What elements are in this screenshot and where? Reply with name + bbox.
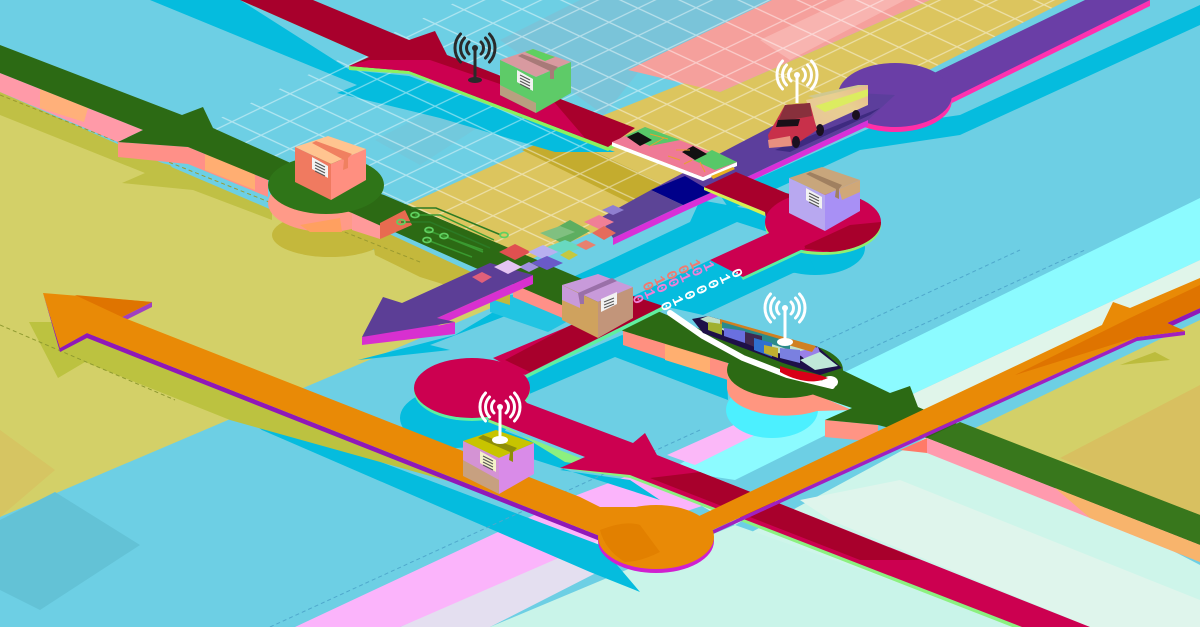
purple fragment (600, 190, 683, 238)
wall node left (268, 174, 384, 232)
tape (312, 141, 352, 170)
tractor wheel rear (816, 124, 824, 136)
hull (692, 316, 842, 375)
trailer top (808, 85, 868, 100)
right face (536, 62, 571, 113)
shadow: orange arrow on yellow (29, 322, 480, 490)
trace 5 (444, 236, 483, 252)
crimson lower road (488, 395, 1090, 627)
label (806, 188, 822, 209)
shadow: crimson left of box (490, 295, 570, 332)
top face (789, 167, 860, 195)
label (480, 451, 496, 472)
orange left wing dark (75, 295, 152, 317)
right face (331, 149, 366, 200)
chip and pixel fragments (472, 127, 737, 283)
board lower wall (612, 142, 737, 181)
shadow on central yellow (522, 135, 665, 203)
wall mid highlight (665, 344, 710, 374)
top accent (525, 49, 555, 61)
boxes (295, 49, 860, 494)
shadow: orange left road (222, 402, 640, 592)
pixel: salmon (576, 240, 596, 250)
pixel: lilac 2 (528, 245, 558, 259)
green road left (0, 45, 1200, 545)
purple node (838, 63, 952, 127)
top face (295, 136, 366, 164)
shadow: purple road (540, 200, 768, 292)
lines: pink box (483, 456, 493, 470)
box: tan (562, 274, 633, 338)
stem (498, 407, 502, 440)
crimson node lime edge (765, 195, 881, 255)
pad b (411, 212, 419, 218)
lines: green box (520, 75, 530, 89)
antenna: box (480, 393, 520, 444)
crimson down road upper part (710, 225, 805, 277)
wall left (0, 73, 143, 142)
antenna: truck (777, 61, 817, 103)
band: grey wedge (375, 75, 520, 165)
trace 2 (415, 215, 494, 240)
shadow: orange arrow right on yellow (1120, 352, 1170, 365)
pixel: yellow green (560, 250, 578, 260)
navy block (651, 176, 712, 205)
pixel: lilac (602, 205, 624, 215)
wall red corner (900, 438, 927, 453)
trailer stripe (815, 89, 868, 112)
dashed route: right blue 1 (820, 250, 1020, 343)
pixel: mid purple (519, 262, 539, 272)
lines: orange box (315, 162, 325, 176)
shadow: purple arrow (358, 290, 560, 360)
containers green (708, 322, 722, 335)
purple node wall (838, 68, 952, 132)
crimson node right (765, 192, 881, 252)
containers teal (722, 322, 790, 350)
waves (765, 294, 805, 322)
shadow: green arrow tail (110, 150, 193, 190)
stern deck purple (796, 347, 822, 360)
field: lower left teal facet (0, 492, 140, 610)
band: pink strip (295, 475, 705, 627)
purple top road (930, 0, 1150, 100)
binary row: orange: 01001 (637, 257, 706, 298)
right face (499, 443, 534, 494)
green road right wall (927, 438, 1200, 562)
shadow: green road right of node (370, 225, 510, 305)
waves (480, 393, 520, 421)
left face (463, 441, 499, 494)
board surface (612, 127, 737, 177)
binary digits on road (627, 257, 747, 318)
tip (782, 305, 788, 311)
trace 1 (411, 208, 501, 235)
crimson mid road edge (741, 247, 805, 280)
band: mint above orange road (860, 260, 1200, 430)
base (492, 436, 508, 444)
tape (806, 172, 842, 199)
crimson road edge below box (525, 306, 663, 378)
band: bright cyan right (670, 198, 1200, 480)
crimson lower road edge (488, 416, 1030, 627)
binary row: pink: 0100101 (627, 259, 719, 311)
pad e (440, 234, 448, 238)
purple lower arrow (362, 263, 533, 337)
stem (784, 308, 786, 342)
chip 2 (682, 146, 707, 160)
red pad (380, 210, 412, 239)
base (777, 338, 793, 346)
left face (500, 60, 536, 113)
wall highlight left (40, 89, 88, 122)
crimson right segment (704, 172, 830, 233)
pixel: green (545, 220, 590, 245)
dashed routes (0, 95, 1085, 627)
containers dark (745, 332, 762, 350)
band: lower right mint (700, 430, 1200, 627)
containers blue (724, 328, 745, 343)
containers orange (720, 319, 816, 352)
wall arrow right (825, 420, 878, 442)
tip (794, 72, 800, 78)
pad a (500, 232, 508, 238)
deck (700, 316, 822, 358)
pads (397, 212, 508, 242)
shadow: green node (272, 213, 388, 257)
tip (472, 45, 478, 51)
front wheel (792, 136, 800, 148)
pixel: road pink cluster (472, 272, 492, 283)
shadow: top purple (720, 5, 1200, 210)
orange node (598, 505, 714, 569)
stem (474, 50, 476, 78)
grid lines (200, 0, 1068, 275)
left bottom strip (500, 85, 536, 113)
crimson arrow lighter band (349, 60, 585, 138)
trace 4 (426, 230, 483, 250)
antenna: dark on road (455, 34, 495, 83)
lines: tan box (604, 298, 614, 308)
wall after node (352, 213, 380, 239)
top face (463, 430, 534, 458)
dashed route: lower blue (270, 430, 700, 627)
label (601, 292, 617, 312)
field: left yellow darker corner (0, 430, 55, 517)
shadow: digits section (633, 260, 743, 308)
purple top wall (952, 0, 1150, 103)
bow deck (800, 352, 838, 370)
crimson lower dark part (650, 472, 920, 560)
shadow: green road on yellow (0, 92, 272, 220)
field: right yellow (975, 320, 1200, 518)
field: pink grid (628, 0, 930, 92)
board green corner 2 (693, 150, 737, 170)
right corner tan (839, 180, 860, 200)
pad d (425, 228, 433, 232)
purple lower wall (362, 275, 533, 345)
circuit traces (380, 208, 508, 257)
left face (295, 147, 331, 200)
wall node highlight (300, 218, 342, 232)
dashed route: yellow (0, 95, 420, 262)
band: lighter pink streak (760, 0, 905, 60)
dashed route: right blue 2 (845, 250, 1085, 360)
pad c (397, 220, 405, 224)
cab (768, 103, 817, 147)
wake (670, 313, 832, 386)
road: crimson (240, 0, 1090, 627)
traces (650, 134, 705, 172)
containers lilac (780, 348, 800, 363)
containers blue 2 (754, 338, 772, 357)
stem (796, 76, 798, 103)
tape (478, 435, 517, 462)
antennas (455, 34, 817, 444)
top face (562, 274, 633, 302)
pixel: red large (499, 244, 531, 260)
crimson circle lower edge (414, 361, 530, 421)
field: right yellow darker facet (1060, 385, 1200, 518)
antenna: ship (765, 294, 805, 346)
circuit board (612, 127, 737, 181)
box: green (500, 49, 571, 113)
box: purple (789, 167, 860, 231)
crimson segment lime edge (704, 187, 765, 216)
left face (562, 285, 598, 338)
wall after box (623, 330, 728, 380)
right face (598, 287, 633, 338)
road: purple (362, 0, 1150, 345)
ship (670, 313, 842, 388)
purple mid road (651, 92, 895, 205)
pixel: pale lilac (494, 260, 522, 274)
band: pale lavender (400, 520, 700, 627)
wake curl (822, 376, 838, 388)
left upper lilac (562, 285, 580, 308)
band: lower right pale (800, 480, 1200, 627)
band: lower mint (490, 525, 1022, 627)
green node left (268, 156, 384, 214)
purple mid road wall (613, 120, 868, 245)
orange right road (695, 278, 1200, 538)
shadow: ship node (726, 382, 818, 438)
orange left road (43, 293, 640, 540)
tape (578, 278, 617, 304)
left face (789, 178, 825, 231)
wall arrow (118, 142, 268, 197)
pixel: pink (584, 215, 614, 229)
shadow: crimson lower (470, 425, 660, 500)
chip 1 (627, 132, 652, 146)
right face (825, 180, 860, 231)
lines: purple box (809, 193, 819, 207)
road: orange (43, 278, 1200, 573)
board green corner (625, 127, 680, 146)
orange right edge (700, 331, 1185, 540)
crimson down road lower part (493, 296, 663, 375)
truck ground shadow (775, 108, 880, 152)
left upper pink (463, 441, 499, 480)
crimson node left (414, 358, 530, 418)
trailer side (806, 85, 868, 128)
contacts (711, 167, 735, 179)
bow red water (780, 366, 828, 381)
tip (497, 404, 503, 410)
label (517, 70, 533, 91)
green road right segment (927, 422, 1200, 545)
wall ship node (727, 372, 852, 416)
windshield (776, 119, 800, 127)
truck (768, 85, 880, 152)
band: pink upper strip (667, 420, 765, 465)
band: upper grey blue (500, 0, 775, 115)
field: central yellow grid (400, 0, 1068, 275)
orange node edge (598, 509, 714, 573)
trace 3 (401, 222, 490, 248)
shadow: crimson circle right (765, 221, 865, 275)
binary row: white: 0100010 (655, 266, 747, 318)
crimson dark section (505, 296, 663, 372)
orange right dark (1015, 285, 1200, 375)
trace 6 (427, 240, 472, 257)
waves (455, 34, 495, 62)
trailer wheels (852, 110, 860, 120)
pad f (423, 238, 431, 242)
green node ship (727, 342, 843, 398)
label (312, 157, 328, 178)
orange wing edge (122, 302, 152, 322)
box: orange (295, 136, 366, 200)
shadow: L under green and crimson (525, 335, 728, 400)
orange left edge (43, 293, 600, 541)
crimson node right dark (800, 222, 881, 252)
label lines on boxes (315, 75, 819, 470)
box: pink and yellow (463, 430, 534, 494)
wall before box (513, 283, 572, 322)
bumper (768, 136, 792, 148)
orange top right edge (1167, 308, 1200, 326)
crimson upper arrow road (240, 0, 635, 147)
shadow: under mid crimson (663, 248, 815, 315)
field: left yellow (0, 92, 510, 517)
base (468, 77, 482, 83)
dashed route: lower left (0, 325, 175, 400)
wall orange right (1055, 488, 1200, 562)
waves (777, 61, 817, 89)
shadow: crimson circle left (400, 388, 510, 448)
pixel: blue purple (531, 256, 563, 270)
top face (500, 49, 571, 77)
pixel: light green (540, 226, 575, 240)
cab roof (778, 103, 812, 122)
tape (518, 54, 558, 79)
wall highlight mid (205, 154, 255, 190)
pixel: teal (547, 240, 583, 254)
crimson top edge highlight (240, 0, 615, 151)
containers yellow (764, 345, 778, 358)
shadow: upper crimson road (150, 0, 615, 152)
orange node dark (600, 523, 660, 562)
pixel: red (592, 226, 616, 240)
band: light triangle between roads (700, 488, 800, 525)
